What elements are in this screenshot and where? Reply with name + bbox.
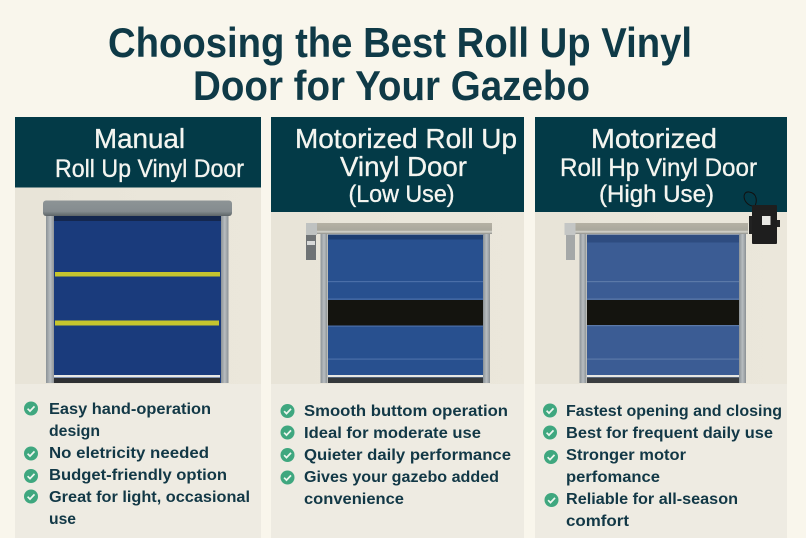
panel: motorized high use [535, 117, 787, 538]
title: Door for Your Gazebo [193, 62, 590, 109]
title [108, 19, 692, 109]
low use door illustration [306, 223, 492, 383]
feature list: manual: Budget-friendly option [49, 467, 227, 484]
header: manual [15, 117, 261, 188]
feature list: manual [15, 384, 261, 538]
feature list: manual: Great for light, occasional [49, 489, 250, 506]
panel: motorized low use [271, 117, 524, 538]
wall background [271, 212, 524, 384]
feature list: high use: comfort [566, 513, 630, 530]
header: low use [271, 117, 524, 212]
header: manual: Manual [94, 123, 185, 154]
feature list: high use: Reliable for all-season [566, 491, 738, 508]
header: low use: Motorized Roll Up [295, 123, 517, 154]
header: low use: (Low Use) [348, 181, 454, 208]
title: Choosing the Best Roll Up Vinyl [108, 19, 692, 66]
feature list: manual: No eletricity needed [49, 445, 209, 462]
feature list: low use: Ideal for moderate use [304, 425, 481, 442]
feature list: manual: use [49, 511, 76, 528]
feature list: high use: Best for frequent daily use [566, 425, 773, 442]
feature list: low use [271, 384, 524, 538]
feature list: high use: Stronger motor [566, 447, 686, 464]
motor unit [744, 192, 780, 244]
header: high use: (High Use) [599, 181, 714, 208]
feature list: high use [535, 384, 787, 538]
header: low use: Vinyl Door [340, 151, 467, 182]
header: manual: Roll Up Vinyl Door [55, 155, 244, 183]
header: high use [535, 117, 787, 212]
feature list: low use: Smooth buttom operation [304, 403, 508, 420]
feature list: manual: Easy hand-operation [49, 401, 211, 418]
high use door illustration [564, 223, 748, 383]
feature list: manual: design [49, 423, 100, 440]
manual door illustration [43, 200, 232, 383]
motor bracket [306, 223, 317, 260]
header: high use: Motorized [591, 123, 717, 154]
feature list: low use: Quieter daily performance [304, 447, 511, 464]
feature list: low use: convenience [304, 491, 404, 508]
feature list: low use: Gives your gazebo added [304, 469, 499, 486]
feature list: high use: Fastest opening and closing [566, 403, 782, 420]
motor bracket [564, 223, 576, 260]
header: high use: Roll Hp Vinyl Door [560, 154, 757, 182]
panel: manual door [15, 117, 261, 538]
wall background [15, 187, 261, 384]
wall background [535, 212, 787, 384]
feature list: high use: perfomance [566, 469, 660, 486]
